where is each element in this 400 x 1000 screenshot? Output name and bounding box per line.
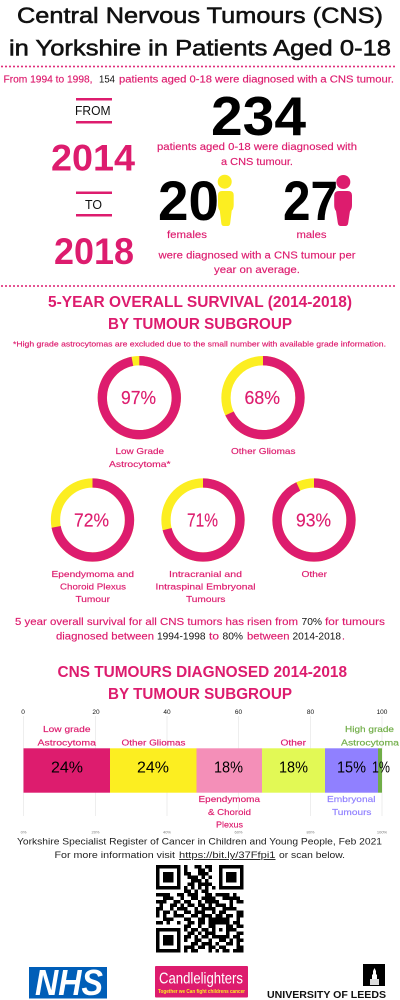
females count: 20 <box>158 169 219 232</box>
to label <box>76 192 112 216</box>
bottom axis labels <box>21 830 388 835</box>
logo: University of Leeds <box>267 964 386 1000</box>
males label: males <box>296 229 326 241</box>
logo: Candlelighters <box>155 966 248 998</box>
heading: diagnoses: BY TUMOUR SUBGROUP <box>108 686 292 703</box>
bar values: 1% <box>372 759 390 776</box>
donut: intracranial and intraspinal embryonal: Tumours <box>186 594 226 604</box>
panel: survival donuts <box>52 361 351 604</box>
panel: patient counts <box>157 85 357 276</box>
bar values: 18% <box>214 759 243 776</box>
chart: tumour subgroups stacked bar <box>21 709 399 835</box>
survival summary text: 1994-1998 <box>157 631 206 643</box>
top axis labels: 0 <box>21 709 25 716</box>
bottom axis labels: 100% <box>377 830 388 835</box>
survival summary text <box>15 616 385 643</box>
segment labels: Tumours <box>332 807 372 817</box>
source and link text <box>17 836 382 861</box>
donut: low grade astrocytoma: Low Grade <box>116 446 164 456</box>
intro text <box>4 74 394 86</box>
donut: other gliomas: Other Gliomas <box>231 446 296 456</box>
intro text: 154 <box>99 74 115 86</box>
segment labels: Astrocytoma <box>38 738 96 748</box>
bar values: 24% <box>51 759 83 776</box>
donut: low grade astrocytoma: 97% <box>121 388 156 408</box>
donut: other gliomas: 68% <box>244 388 280 408</box>
segment labels: Other <box>280 738 306 748</box>
total caption <box>157 141 357 168</box>
segment labels: Astrocytoma <box>341 738 399 748</box>
segment labels: Ependymoma <box>198 794 260 804</box>
title: Central Nervous Tumours (CNS) <box>17 3 383 28</box>
survival summary text: 2014-2018 <box>292 631 341 643</box>
top axis labels: 80 <box>307 709 314 716</box>
year 2014: 2014 <box>51 138 135 178</box>
total caption: patients aged 0-18 were diagnosed with <box>157 141 357 153</box>
survival summary text: between <box>247 631 290 643</box>
survival summary text: 80% <box>222 631 243 643</box>
heading: survival: BY TUMOUR SUBGROUP <box>108 316 292 333</box>
intro text: From 1994 to 1998, <box>4 74 92 86</box>
donut: other gliomas <box>226 361 300 456</box>
donut: low grade astrocytoma <box>102 361 176 469</box>
top axis labels <box>21 709 388 716</box>
per year caption: year on average. <box>214 264 300 276</box>
from label <box>75 98 112 124</box>
title: in Yorkshire in Patients Aged 0-18 <box>9 36 391 60</box>
icon: female figure <box>218 175 234 226</box>
QR code <box>156 867 244 951</box>
bar values: 15% <box>337 759 366 776</box>
source and link text: or scan below. <box>279 850 345 861</box>
males count: 27 <box>283 169 338 232</box>
donut: other: Other <box>302 569 327 579</box>
heading: survival <box>48 294 352 333</box>
per year caption <box>157 250 356 276</box>
donut: ependymoma and choroid plexus: Ependymoma and <box>52 569 134 579</box>
source and link text: https://bit.ly/37Ffpi1 <box>179 850 276 861</box>
heading: survival: 5-YEAR OVERALL SURVIVAL (2014-2018) <box>48 294 352 311</box>
total caption: a CNS tumour. <box>221 156 293 168</box>
segment labels: High grade <box>345 724 394 734</box>
bottom axis labels: 0% <box>21 830 27 835</box>
to label: TO <box>85 197 102 212</box>
footnote: *High grade astrocytomas are excluded due to the small number with available grade information. <box>13 340 386 349</box>
survival summary text: . <box>342 631 345 643</box>
top axis labels: 20 <box>92 709 100 716</box>
bottom axis labels: 60% <box>234 830 243 835</box>
donut: intracranial and intraspinal embryonal: Intracranial and <box>169 569 242 579</box>
bar values: 24% <box>137 759 169 776</box>
donut: intracranial and intraspinal embryonal: 71% <box>187 510 218 530</box>
donut: ependymoma and choroid plexus <box>52 483 134 604</box>
donut: ependymoma and choroid plexus: Tumour <box>76 594 110 604</box>
segment labels: Plexus <box>216 820 243 830</box>
donut: intracranial and intraspinal embryonal <box>156 483 256 604</box>
per year caption: were diagnosed with a CNS tumour per <box>157 250 356 262</box>
donut: intracranial and intraspinal embryonal: Intraspinal Embryonal <box>156 582 256 592</box>
segment labels: Embryonal <box>327 794 376 804</box>
donut: other <box>277 483 351 579</box>
top axis labels: 40 <box>163 709 171 716</box>
survival summary text: to <box>209 631 219 643</box>
bar values: 18% <box>279 759 308 776</box>
panel: date range <box>51 98 135 272</box>
heading: diagnoses <box>58 664 347 703</box>
icon: male figure <box>334 175 352 226</box>
segment labels: Low grade <box>43 724 91 734</box>
bar segments <box>24 748 382 793</box>
survival summary text: 5 year overall survival for all CNS tumors has risen from <box>15 616 298 628</box>
bottom axis labels: 20% <box>91 830 100 835</box>
bar values <box>51 759 390 776</box>
segment labels: Other Gliomas <box>122 738 186 748</box>
survival summary text: for tumours <box>325 616 385 628</box>
survival summary text: diagnosed between <box>56 631 154 643</box>
from label: FROM <box>75 103 110 118</box>
survival summary text: 70% <box>302 616 322 628</box>
title <box>9 3 391 60</box>
total 234: 234 <box>211 85 306 147</box>
segment labels <box>38 724 399 830</box>
bottom axis labels: 40% <box>163 830 171 835</box>
donut: ependymoma and choroid plexus: Choroid Plexus <box>60 582 126 592</box>
bottom axis labels: 80% <box>306 830 315 835</box>
logo: Candlelighters: Together we Can fight childrens cancer <box>158 989 245 995</box>
donut: other: 93% <box>296 510 331 530</box>
source and link text: For more information visit <box>54 850 175 861</box>
females label: females <box>167 229 207 241</box>
year 2018: 2018 <box>54 231 134 272</box>
intro text: patients aged 0-18 were diagnosed with a CNS tumour. <box>119 74 394 86</box>
source and link text: Yorkshire Specialist Register of Cancer in Children and Young People, Feb 2021 <box>17 836 382 847</box>
top axis labels: 60 <box>235 709 242 716</box>
donut: ependymoma and choroid plexus: 72% <box>74 510 109 530</box>
segment labels: & Choroid <box>208 807 251 817</box>
top axis labels: 100 <box>377 709 388 716</box>
heading: diagnoses: CNS TUMOURS DIAGNOSED 2014-2018 <box>58 664 347 681</box>
logo: Candlelighters: Candlelighters <box>159 970 243 988</box>
donut: low grade astrocytoma: Astrocytoma* <box>109 459 171 469</box>
